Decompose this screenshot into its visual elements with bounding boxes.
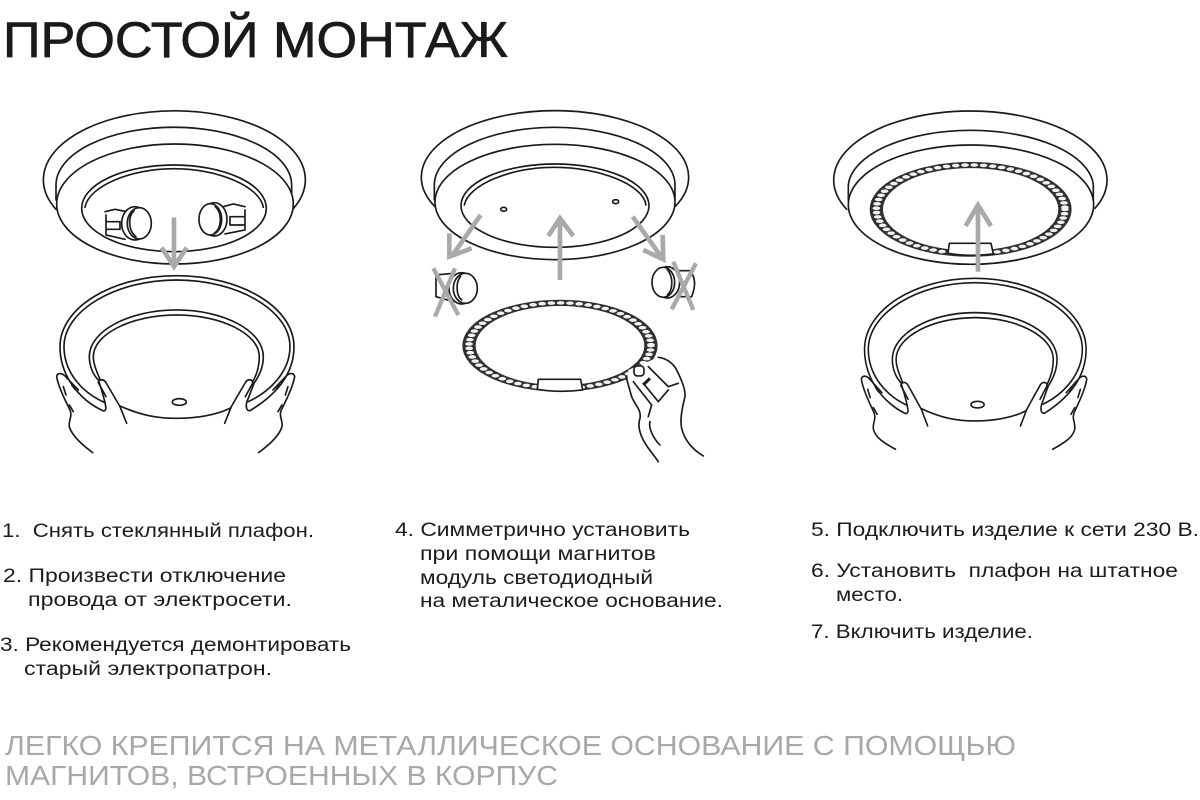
text block: steps 5-7: 6. Установить плафон на штатное [811,561,1178,582]
arrow: down left [449,215,481,257]
text block: grey footer note: ЛЕГКО КРЕПИТСЯ НА МЕТАЛЛИЧЕСКОЕ ОСНОВАНИЕ С ПОМОЩЬЮ [5,730,1016,761]
text block: steps 1-3: 3. Рекомендуется демонтировать [0,635,351,656]
ceiling base with magnets holes [421,111,689,260]
title: ПРОСТОЙ МОНТАЖ [3,11,508,68]
text block: steps 5-7: место. [836,585,903,606]
text block: steps 5-7: 5. Подключить изделие к сети 230 В. [811,520,1199,541]
icon: left hand [861,376,928,449]
text block: step 4: 4. Симметрично установить [395,520,690,541]
icon: hand holding ring [626,357,703,462]
text block: steps 1-3: старый электропатрон. [24,659,272,680]
text block: step 4: при помощи магнитов [420,544,656,565]
arrow: down [162,217,187,267]
ceiling base with sockets [43,111,305,264]
panel: step 2 illustration [421,111,703,462]
text block: grey footer note [5,730,1016,791]
arrow: up [548,218,573,280]
text block: step 4: модуль светодиодный [420,568,653,589]
LED ring module [469,303,651,391]
icon: left socket [105,207,151,240]
lampshade held by hands [861,278,1087,449]
text block: steps 5-7: 7. Включить изделие. [811,622,1033,643]
arrow: down right [633,217,663,259]
text block: steps 1-3 [0,521,351,680]
icon: removed left socket [433,268,477,317]
icon: right hand [1020,376,1087,449]
text block: steps 1-3: 2. Произвести отключение [3,566,286,587]
text block: grey footer note: МАГНИТОВ, ВСТРОЕННЫХ В КОРПУС [5,760,558,791]
icon: removed right socket [652,262,696,310]
arrow: up [966,205,991,272]
text block: step 4: на металическое основание. [420,591,723,612]
lampshade held by hands [57,276,295,453]
icon: right hand [225,374,295,453]
icon: right socket [199,203,245,236]
icon: left hand [57,374,127,453]
ceiling base with installed LED ring [834,111,1107,264]
panel: step 1 illustration [43,111,305,453]
text block: steps 5-7 [811,520,1199,643]
text block: steps 1-3: 1. Снять стеклянный плафон. [2,521,314,542]
text block: steps 1-3: провода от электросети. [28,590,292,611]
text block: step 4 [395,520,723,612]
panel: step 3 illustration [834,111,1107,449]
